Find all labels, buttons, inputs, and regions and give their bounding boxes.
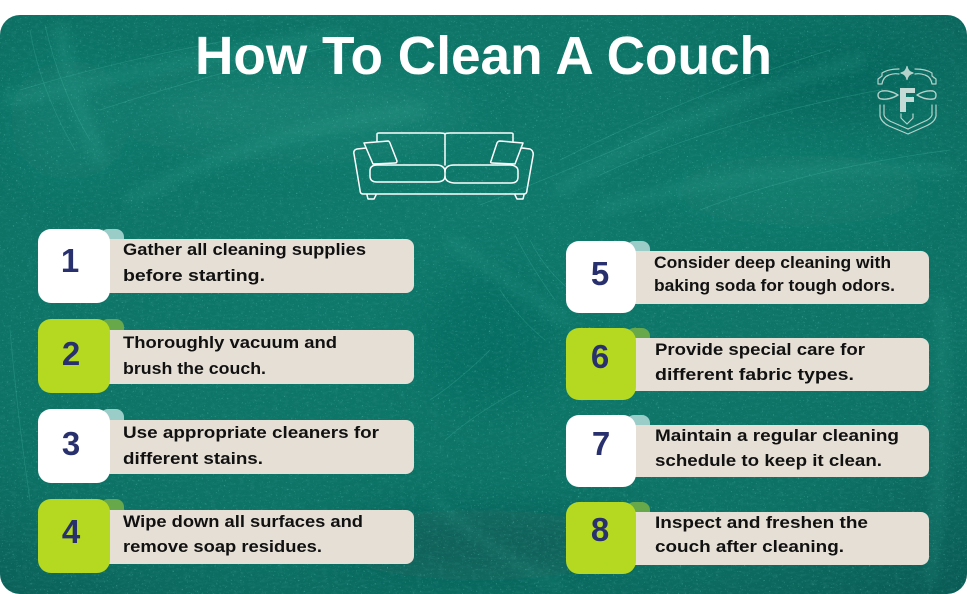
step 2 bbox=[38, 319, 414, 393]
step 4: 4 bbox=[62, 513, 81, 550]
step 5: 5 bbox=[591, 255, 609, 292]
icon: couch bbox=[354, 133, 533, 199]
step 1: Gather all cleaning supplies bbox=[123, 240, 366, 259]
step 1: 1 bbox=[61, 242, 79, 279]
step 8 bbox=[566, 502, 929, 574]
step 2: Thoroughly vacuum and bbox=[123, 333, 337, 352]
step 4: remove soap residues. bbox=[123, 537, 322, 556]
icon: brand logo bbox=[878, 66, 936, 134]
step 1: before starting. bbox=[123, 266, 265, 285]
step 6 bbox=[566, 328, 929, 400]
step 7: schedule to keep it clean. bbox=[655, 451, 882, 470]
step 6: 6 bbox=[591, 338, 609, 375]
step 8: Inspect and freshen the bbox=[655, 513, 868, 532]
title: How To Clean A Couch bbox=[195, 26, 772, 86]
step 6: Provide special care for bbox=[655, 340, 865, 359]
step 3: 3 bbox=[62, 425, 80, 462]
step 8: 8 bbox=[591, 511, 609, 548]
step 1 bbox=[38, 229, 414, 303]
step 3: different stains. bbox=[123, 449, 263, 468]
step 2: brush the couch. bbox=[123, 359, 266, 378]
step 2: 2 bbox=[62, 335, 80, 372]
step 5 bbox=[566, 241, 929, 313]
step 4 bbox=[38, 499, 414, 573]
step 5: Consider deep cleaning with bbox=[654, 253, 891, 272]
step 3 bbox=[38, 409, 414, 483]
step 3: Use appropriate cleaners for bbox=[123, 423, 379, 442]
step 6: different fabric types. bbox=[655, 365, 854, 384]
step 8: couch after cleaning. bbox=[655, 537, 844, 556]
step 4: Wipe down all surfaces and bbox=[123, 512, 363, 531]
step 5: baking soda for tough odors. bbox=[654, 276, 895, 295]
step 7 bbox=[566, 415, 929, 487]
step 7: 7 bbox=[592, 425, 610, 462]
step 7: Maintain a regular cleaning bbox=[655, 426, 899, 445]
